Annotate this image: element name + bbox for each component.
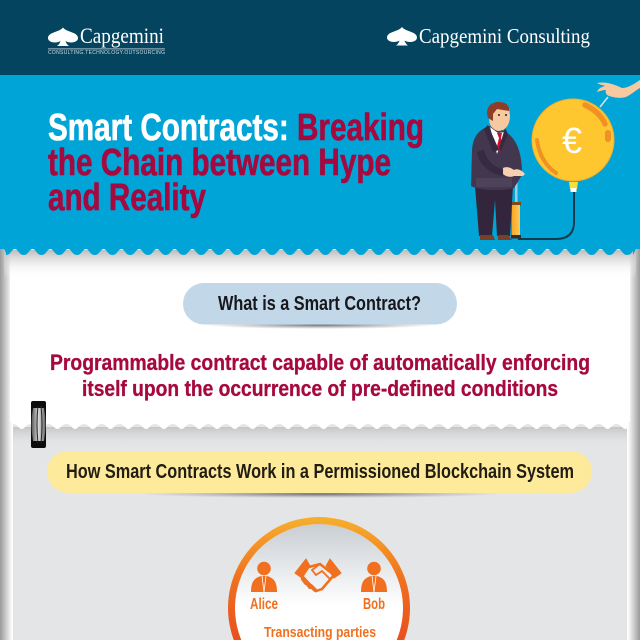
panel: transacting parties circle [228,517,410,640]
icon: air tube [518,192,574,239]
logo: Capgemini left [48,23,165,56]
definition text [50,350,590,401]
panel: gray process section [13,422,627,640]
section heading: what is a smart contract [183,283,457,329]
wordmark left: Capgemini [80,23,164,48]
section heading: how smart contracts work [47,451,592,498]
section heading: what is a smart contract: What is a Smart Contract? [218,293,421,315]
hands [503,167,525,177]
icon: euro sign: € [562,120,582,161]
tagline left: CONSULTING.TECHNOLOGY.OUTSOURCING [48,50,165,56]
title: the Chain between Hype [48,142,391,184]
icon: Bob [361,562,387,592]
head [489,108,510,131]
icon: hand with needle [597,80,640,107]
icon: Alice [251,562,277,592]
icon: balloon [532,99,614,192]
icon: spade left [48,28,78,46]
definition text: itself upon the occurrence of pre-defined conditions [82,376,558,401]
illustration: man inflating euro balloon [471,80,640,240]
panel: blue hero band [0,75,640,256]
logo: Capgemini Consulting right [387,24,590,48]
label: Bob: Bob [363,596,385,613]
title: and Reality [48,177,206,219]
icon: binder ring [31,401,46,448]
icon: businessman [471,102,525,240]
icon: handshake [295,559,341,591]
title [48,107,424,219]
wordmark right: Capgemini Consulting [419,24,590,48]
icon: bicycle pump [511,174,521,238]
panel: white definition section [4,250,636,422]
legs [475,186,513,236]
side shadows [0,240,640,640]
title: Smart Contracts: Breaking [48,107,424,149]
jacket [471,126,522,190]
icon: spade right [387,27,417,46]
header bar [0,0,640,75]
label: Alice: Alice [250,596,278,613]
